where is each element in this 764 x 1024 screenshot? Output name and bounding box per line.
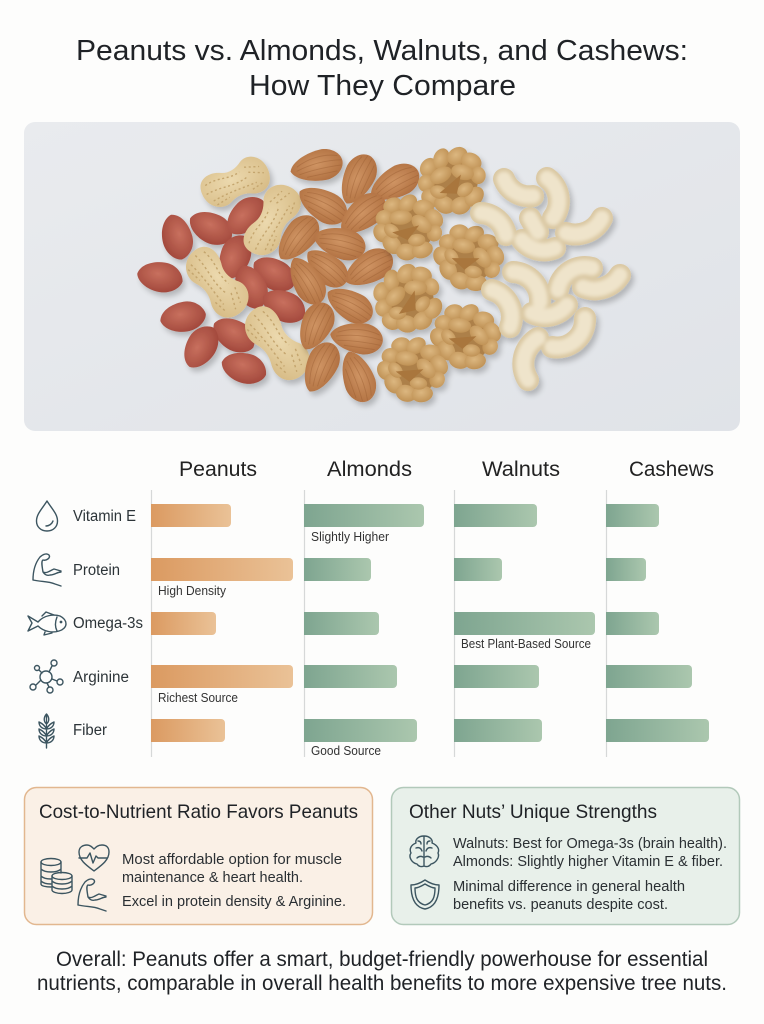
row: Protein: Protein bbox=[73, 562, 120, 579]
row: Vitamin E: Slightly Higher bbox=[311, 530, 389, 544]
conclusion: nutrients, comparable in overall health benefits to more expensive tree nuts. bbox=[37, 972, 727, 995]
column headings: Almonds bbox=[327, 457, 412, 481]
body text: Walnuts: Best for Omega-3s (brain health). bbox=[453, 835, 727, 852]
row: Omega-3s bbox=[28, 612, 659, 651]
body text: Most affordable option for muscle bbox=[122, 851, 342, 868]
icon: water drop bbox=[36, 501, 58, 531]
icon: shield bbox=[411, 880, 439, 909]
row: Protein bbox=[33, 554, 646, 598]
icon: heart bbox=[79, 845, 109, 871]
title: How They Compare bbox=[249, 70, 516, 102]
peanuts bbox=[135, 152, 317, 388]
panel: nuts photo bbox=[24, 122, 740, 431]
icon: molecule bbox=[30, 660, 63, 693]
body text bbox=[122, 851, 346, 910]
row: Fiber: Fiber bbox=[73, 722, 107, 739]
row: Vitamin E: Vitamin E bbox=[73, 508, 136, 525]
body text bbox=[453, 835, 727, 913]
conclusion bbox=[37, 948, 727, 995]
row: Vitamin E bbox=[36, 501, 659, 544]
title bbox=[76, 35, 688, 102]
icon: wheat bbox=[39, 714, 54, 748]
row: Arginine: Arginine bbox=[73, 669, 129, 686]
column headings: Peanuts bbox=[179, 457, 257, 481]
row: Omega-3s: Best Plant-Based Source bbox=[461, 637, 591, 651]
row: Fiber: Good Source bbox=[311, 744, 381, 758]
title: Peanuts vs. Almonds, Walnuts, and Cashews: bbox=[76, 35, 688, 67]
column headings: Cashews bbox=[629, 457, 714, 481]
heading: Other Nuts’ Unique Strengths bbox=[409, 801, 657, 823]
row: Arginine: Richest Source bbox=[158, 691, 238, 705]
chart: nutrient comparison bbox=[28, 457, 714, 758]
column headings: Walnuts bbox=[482, 457, 560, 481]
row: Protein: High Density bbox=[158, 584, 227, 598]
conclusion: Overall: Peanuts offer a smart, budget-friendly powerhouse for essential bbox=[56, 948, 708, 971]
heading: Cost-to-Nutrient Ratio Favors Peanuts bbox=[39, 801, 358, 823]
body text: benefits vs. peanuts despite cost. bbox=[453, 896, 668, 913]
cashews bbox=[481, 178, 620, 380]
almonds bbox=[269, 145, 425, 407]
icon: fish bbox=[28, 612, 66, 635]
row: Omega-3s: Omega-3s bbox=[73, 615, 143, 632]
icon: flexed arm bbox=[33, 554, 61, 586]
icon: arm bbox=[78, 879, 106, 911]
walnuts bbox=[361, 141, 519, 417]
body text: Excel in protein density & Arginine. bbox=[122, 893, 346, 910]
panel: cost-to-nutrient bbox=[24, 788, 372, 924]
row: Fiber bbox=[39, 714, 709, 758]
panel: other nuts bbox=[392, 788, 740, 924]
body text: maintenance & heart health. bbox=[122, 869, 303, 886]
body text: Almonds: Slightly higher Vitamin E & fiber. bbox=[453, 853, 723, 870]
column headings bbox=[179, 457, 714, 481]
icon: coins bbox=[41, 858, 72, 894]
icon: brain bbox=[410, 836, 439, 867]
row: Arginine bbox=[30, 660, 692, 705]
body text: Minimal difference in general health bbox=[453, 878, 685, 895]
